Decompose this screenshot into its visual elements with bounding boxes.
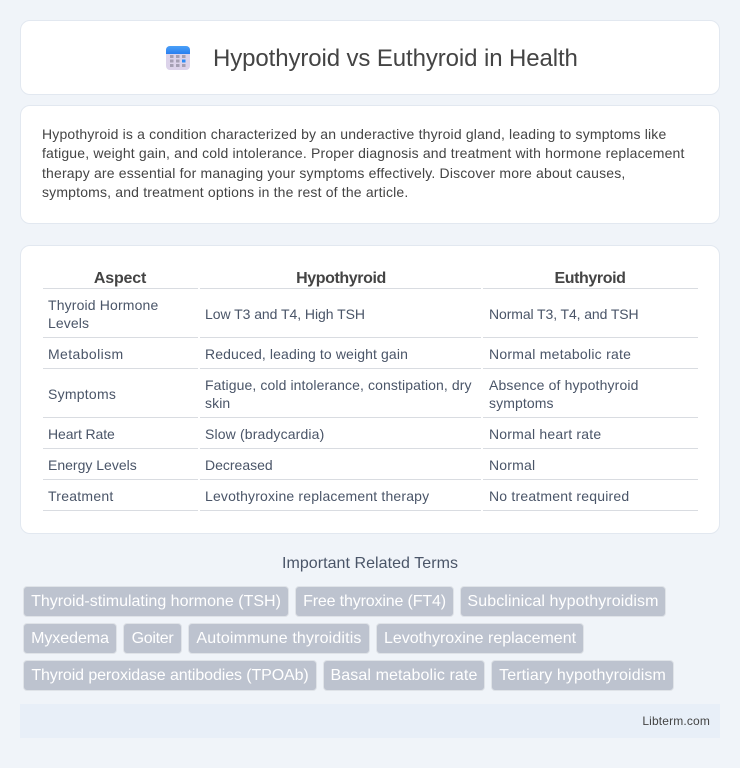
row: metabolism: Normal metabolic rate: [489, 346, 631, 362]
chip: [295, 586, 454, 617]
chip: Thyroid-stimulating hormone (TSH): [31, 593, 281, 610]
chip: [323, 660, 485, 691]
row: heart rate: Heart Rate: [48, 426, 115, 442]
row: thyroid hormone levels: [48, 297, 639, 331]
row: metabolism: Metabolism: [48, 346, 124, 362]
chip: [23, 623, 117, 654]
row: symptoms: Symptoms: [48, 386, 116, 402]
row: symptoms: skin: [205, 395, 230, 411]
row: thyroid hormone levels: Levels: [48, 315, 89, 331]
chip: Subclinical hypothyroidism: [467, 593, 659, 610]
description text: therapy are essential for managing your symptoms effectively. Discover more about causes,: [42, 165, 625, 181]
table header: Hypothyroid: [296, 270, 386, 287]
chip: Autoimmune thyroiditis: [196, 630, 362, 647]
row: heart rate: Normal heart rate: [489, 426, 601, 442]
description text: Hypothyroid is a condition characterized by an underactive thyroid gland, leading to symptoms like: [42, 126, 666, 142]
related terms chips: [23, 586, 674, 691]
row: treatment: No treatment required: [489, 488, 629, 504]
row: heart rate: [48, 426, 601, 442]
footer bar: [20, 704, 720, 738]
chip: Free thyroxine (FT4): [303, 593, 446, 610]
chip: Tertiary hypothyroidism: [499, 667, 666, 684]
chip: [460, 586, 666, 617]
row: treatment: Treatment: [48, 488, 114, 504]
row: thyroid hormone levels: Low T3 and T4, High TSH: [205, 306, 365, 322]
row: metabolism: Reduced, leading to weight gain: [205, 346, 408, 362]
row: energy levels: Normal: [489, 457, 535, 473]
chip: [123, 623, 182, 654]
description card: [20, 105, 720, 224]
row: heart rate: Slow (bradycardia): [205, 426, 324, 442]
comparison table: [43, 270, 698, 511]
chip: Myxedema: [31, 630, 109, 647]
row: energy levels: Decreased: [205, 457, 273, 473]
related terms heading: Important Related Terms: [282, 555, 458, 572]
chip: [23, 586, 289, 617]
row: energy levels: [48, 457, 535, 473]
row: thyroid hormone levels: Thyroid Hormone: [48, 297, 158, 313]
row: symptoms: [48, 377, 639, 411]
description text: fatigue, weight gain, and cold intolerance. Proper diagnosis and treatment with hormone replacement: [42, 145, 685, 161]
table card: [20, 245, 720, 534]
chip: Thyroid peroxidase antibodies (TPOAb): [31, 667, 309, 684]
description text: [42, 126, 685, 200]
row: energy levels: Energy Levels: [48, 457, 137, 473]
chip: [376, 623, 584, 654]
row: metabolism: [48, 346, 631, 362]
chip: Levothyroxine replacement: [384, 630, 576, 647]
table header: [94, 270, 626, 287]
row: treatment: Levothyroxine replacement therapy: [205, 488, 429, 504]
row: symptoms: symptoms: [489, 395, 554, 411]
table header: Euthyroid: [554, 270, 626, 287]
footer credit: Libterm.com: [642, 714, 710, 728]
row: treatment: [48, 488, 629, 504]
row: symptoms: Absence of hypothyroid: [489, 377, 639, 393]
chip: [188, 623, 370, 654]
icon: calendar: [166, 46, 190, 70]
chip: Goiter: [132, 630, 173, 647]
header card: [20, 20, 720, 95]
table header: Aspect: [94, 270, 146, 287]
title: Hypothyroid vs Euthyroid in Health: [213, 45, 578, 72]
chip: Basal metabolic rate: [331, 667, 477, 684]
chip: [23, 660, 317, 691]
row: thyroid hormone levels: Normal T3, T4, and TSH: [489, 306, 639, 322]
chip: [491, 660, 674, 691]
description text: symptoms, and treatment options in the rest of the article.: [42, 184, 408, 200]
row: symptoms: Fatigue, cold intolerance, constipation, dry: [205, 377, 472, 393]
